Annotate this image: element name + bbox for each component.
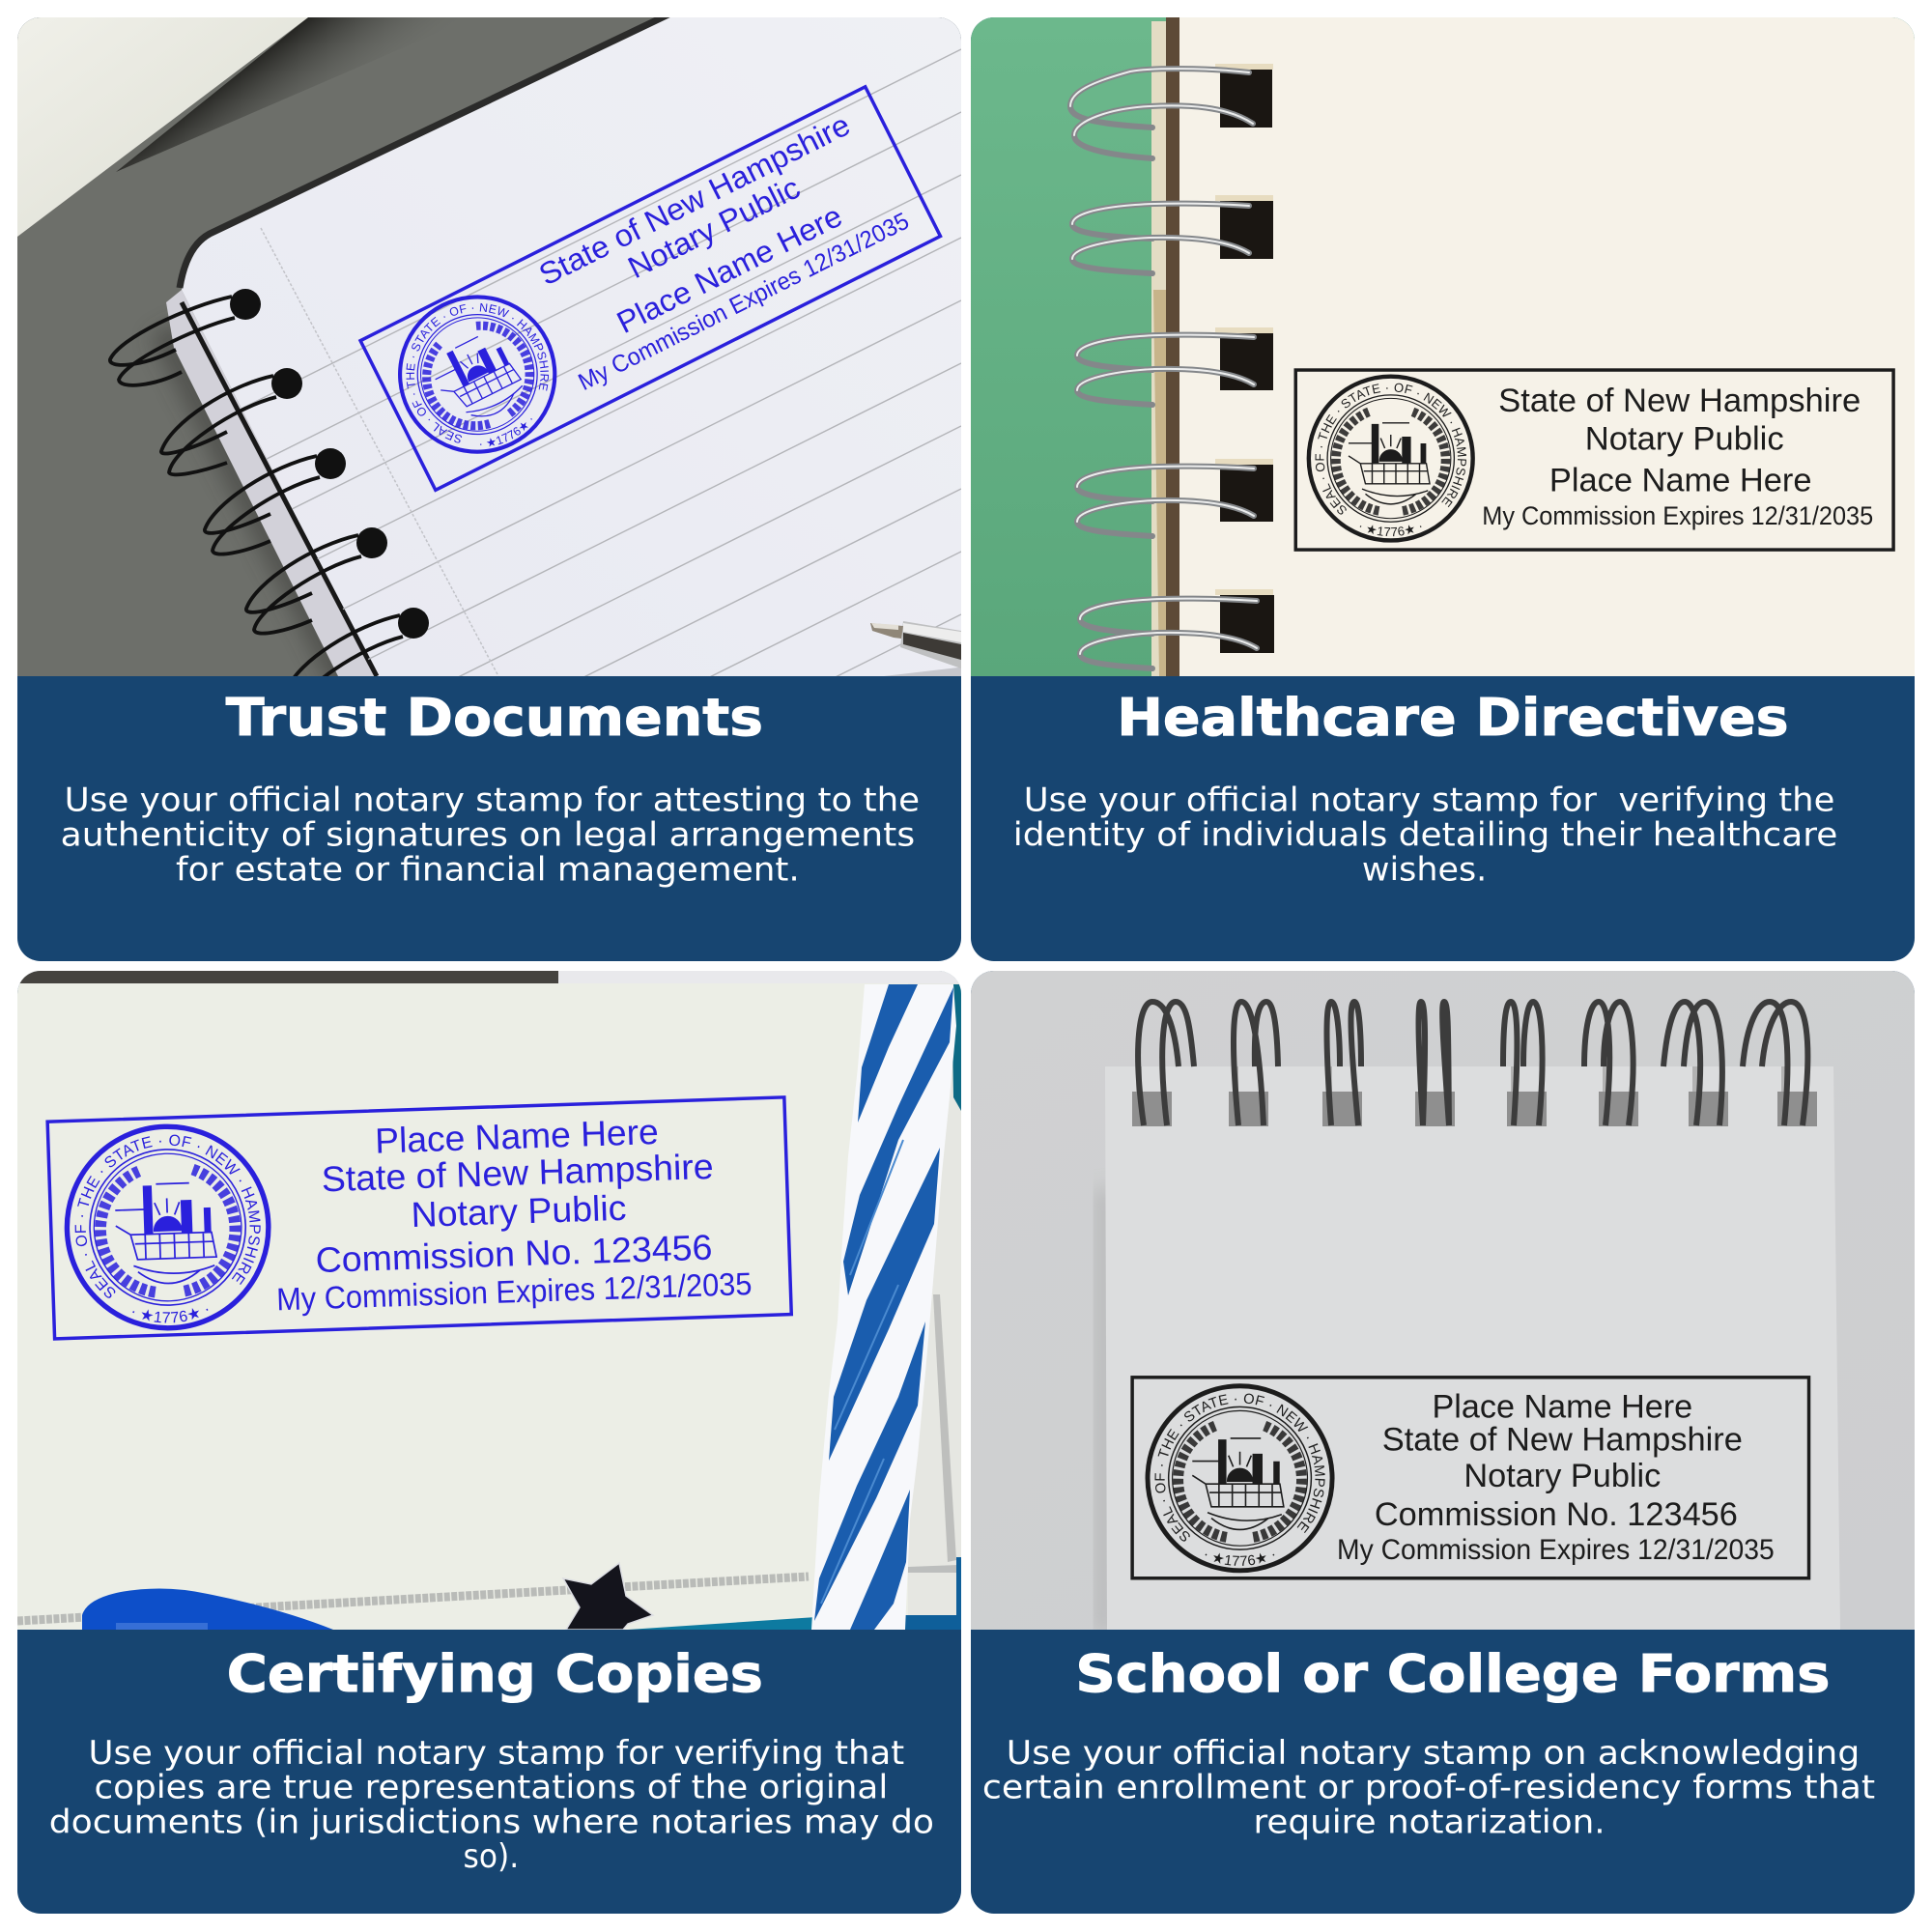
stamp impression: blue: Notary Public bbox=[411, 1188, 627, 1235]
stamp impression: rotated blue: Notary Public bbox=[622, 170, 806, 285]
stamp impression: blue: State of New Hampshire bbox=[321, 1147, 714, 1199]
stamp impression: black: Notary Public bbox=[1585, 421, 1784, 458]
stamp impression: black bbox=[1130, 1376, 1810, 1580]
stamp impression: black: My Commission Expires 12/31/2035 bbox=[1482, 501, 1873, 530]
body text: so). bbox=[464, 1837, 519, 1875]
stamp impression: black: Notary Public bbox=[1463, 1458, 1661, 1494]
body text: documents (in jurisdictions where notaries may do bbox=[49, 1803, 934, 1840]
stamp impression: blue bbox=[45, 1095, 794, 1341]
panel: trust documents bbox=[17, 17, 961, 961]
seal: SEAL · OF · THE · STATE · OF · NEW · HAMPSHIRE bbox=[1155, 1393, 1325, 1542]
photo: grey spiral notepad bbox=[971, 971, 1915, 1630]
stamp impression: black: State of New Hampshire bbox=[1382, 1421, 1743, 1458]
stamp impression: black: Place Name Here bbox=[1433, 1389, 1692, 1426]
stamp impression: black: Place Name Here bbox=[1549, 462, 1812, 498]
panel: school or college forms bbox=[971, 971, 1915, 1914]
stamp impression: black bbox=[1294, 368, 1895, 552]
stamp impression: blue: Place Name Here bbox=[375, 1112, 659, 1161]
seal: SEAL · OF · THE · STATE · OF · NEW · HAMPSHIRE bbox=[75, 1134, 261, 1298]
photo: spiral notebook on grey desk bbox=[17, 17, 961, 676]
icon: punched holes bbox=[1215, 64, 1274, 653]
stamp impression: blue: My Commission Expires 12/31/2035 bbox=[276, 1265, 753, 1317]
panel: healthcare directives bbox=[971, 17, 1915, 961]
stamp impression: black: Commission No. 123456 bbox=[1375, 1496, 1738, 1533]
icon: silver star bbox=[563, 1563, 653, 1630]
icon: notebook spiral coils bbox=[110, 289, 429, 710]
stamp impression: rotated blue: State of New Hampshire bbox=[533, 107, 856, 292]
stamp impression: rotated blue bbox=[357, 85, 943, 493]
body text: wishes. bbox=[1362, 850, 1487, 888]
icon: black spiral coils bbox=[1138, 1002, 1807, 1125]
body text: Use your official notary stamp for verifying that bbox=[89, 1734, 904, 1772]
stamp impression: rotated blue: Place Name Here bbox=[611, 198, 847, 340]
body text bbox=[49, 1734, 934, 1875]
seal: · ★1776★ · bbox=[480, 418, 532, 446]
body text: for estate or financial management. bbox=[176, 850, 800, 888]
heading: School or College Forms bbox=[1075, 1643, 1830, 1704]
body text: require notarization. bbox=[1253, 1803, 1605, 1840]
heading: Healthcare Directives bbox=[1117, 687, 1789, 748]
body text: Use your official notary stamp for attesting to the bbox=[65, 781, 920, 819]
seal: SEAL · OF · THE · STATE · OF · NEW · HAMPSHIRE bbox=[1316, 383, 1466, 515]
body text: certain enrollment or proof-of-residency forms that bbox=[982, 1769, 1875, 1806]
stamp impression: black: State of New Hampshire bbox=[1498, 383, 1861, 419]
photo: cream notebook on green bbox=[971, 17, 1915, 676]
stamp impression: rotated blue: My Commission Expires 12/31/2035 bbox=[574, 208, 913, 396]
panel: certifying copies bbox=[17, 971, 961, 1914]
seal: · ★1776★ · bbox=[1206, 1553, 1275, 1566]
body text: copies are true representations of the original bbox=[95, 1769, 888, 1806]
icon: striped candle bbox=[811, 984, 956, 1630]
seal: SEAL · OF · THE · STATE · OF · NEW · HAMPSHIRE bbox=[406, 303, 549, 442]
seal: · ★1776★ · bbox=[132, 1308, 209, 1323]
body text: Use your official notary stamp for verifying the bbox=[1024, 781, 1834, 819]
stamp impression: black: My Commission Expires 12/31/2035 bbox=[1337, 1534, 1775, 1566]
seal: · ★1776★ · bbox=[1360, 525, 1422, 537]
icon: pen tip bbox=[870, 621, 966, 676]
photo: card with striped candle bbox=[17, 971, 961, 1630]
body text: identity of individuals detailing their healthcare bbox=[1013, 816, 1837, 854]
body text bbox=[1013, 781, 1837, 888]
body text: Use your official notary stamp on acknowledging bbox=[1007, 1734, 1860, 1772]
glitter trim line bbox=[17, 1577, 809, 1621]
body text bbox=[61, 781, 920, 888]
body text bbox=[982, 1734, 1875, 1840]
teal band bbox=[628, 1617, 816, 1630]
heading: Trust Documents bbox=[226, 687, 763, 748]
body text: authenticity of signatures on legal arrangements bbox=[61, 816, 915, 854]
ribbon bbox=[82, 1588, 333, 1630]
icon: punched notches bbox=[1132, 1066, 1817, 1126]
heading: Certifying Copies bbox=[227, 1643, 763, 1704]
stamp impression: blue: Commission No. 123456 bbox=[315, 1228, 713, 1280]
icon: silver spiral coils bbox=[1070, 69, 1257, 668]
